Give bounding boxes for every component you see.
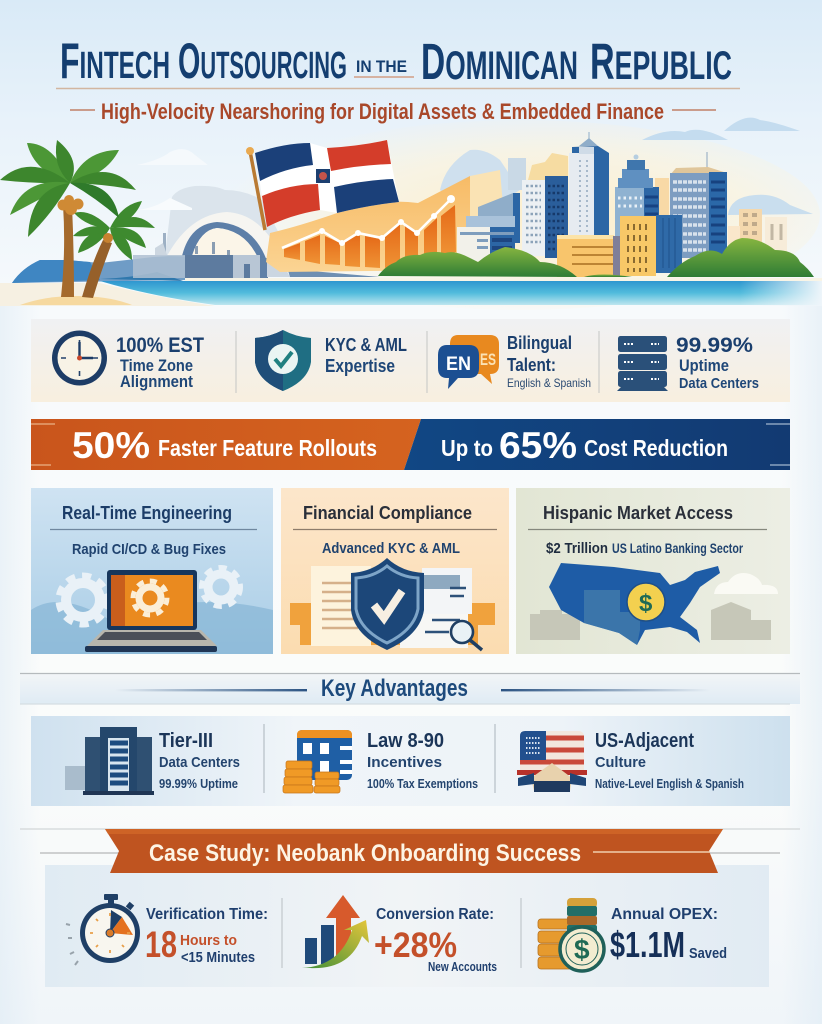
stat: bilingual: English & Spanish xyxy=(507,376,591,390)
title: FINTECH xyxy=(60,33,170,89)
stat: conversion rate: +28% xyxy=(374,926,457,965)
stat: uptime: Uptime xyxy=(679,356,729,375)
icon: dollar coin xyxy=(627,583,665,621)
left shore xyxy=(12,255,187,283)
skyline xyxy=(457,132,787,277)
banner: cost reduction xyxy=(404,419,790,470)
yellow buildings xyxy=(557,215,682,277)
panel: key advantages xyxy=(31,716,790,806)
stat: verification time: 18 xyxy=(145,924,177,965)
ribbon: case study heading xyxy=(105,829,723,873)
stat: conversion rate: Conversion Rate: xyxy=(376,906,494,923)
stat: tier-III: Tier-III xyxy=(159,730,213,752)
stepped tower xyxy=(615,154,659,237)
icon: language bubbles: EN xyxy=(446,354,471,375)
banner: cost reduction: Cost Reduction xyxy=(584,435,728,461)
flag xyxy=(246,140,399,230)
pale distant buildings xyxy=(728,209,787,254)
slate tower xyxy=(670,152,727,258)
stat: time zone xyxy=(116,334,204,391)
orange growth hill xyxy=(266,170,505,272)
stat: bilingual: Talent: xyxy=(507,355,556,375)
icon: magnifier xyxy=(451,621,482,650)
stat: law 8-90: Incentives xyxy=(367,754,442,771)
stat: law 8-90: 100% Tax Exemptions xyxy=(367,776,478,791)
stat: uptime xyxy=(676,334,759,392)
icon: shield with check xyxy=(351,558,424,650)
trees xyxy=(378,238,814,277)
cloud xyxy=(714,573,778,594)
hero illustration xyxy=(0,118,822,310)
stat: uptime: Data Centers xyxy=(679,375,759,392)
panel: hispanic market access xyxy=(516,488,790,654)
window tower xyxy=(522,176,568,258)
monument arch xyxy=(133,212,380,278)
title xyxy=(56,33,740,90)
panel: real-time engineering: Real-Time Engineering xyxy=(62,503,232,523)
icon: incentive building and coins xyxy=(283,730,352,793)
icon: stopwatch xyxy=(66,894,140,965)
stat: law 8-90 xyxy=(367,730,478,791)
sand and sea xyxy=(0,278,822,306)
stat: annual OPEX: Annual OPEX: xyxy=(611,906,718,923)
stat: bilingual xyxy=(507,333,591,390)
low blue building xyxy=(457,193,520,261)
panel: case study results xyxy=(20,829,800,987)
subtitle: High-Velocity Nearshoring for Digital Assets & Embedded Finance xyxy=(101,99,664,124)
banner: faster rollouts: 50% xyxy=(72,425,150,466)
stat: tier-III: 99.99% Uptime xyxy=(159,776,238,791)
stat: bilingual: Bilingual xyxy=(507,333,572,353)
trend line xyxy=(282,195,455,248)
stat: conversion rate xyxy=(374,906,497,974)
grey buildings xyxy=(530,602,771,640)
heading: key advantages: Key Advantages xyxy=(321,675,468,702)
title: REPUBLIC xyxy=(590,33,732,90)
ribbon: case study heading: Case Study: Neobank Onboarding Success xyxy=(149,840,581,867)
heading: key advantages xyxy=(20,674,800,704)
icon: shield xyxy=(255,330,311,391)
stat: KYC xyxy=(325,335,407,376)
small palm tree xyxy=(73,201,155,298)
panel: real-time engineering: Rapid CI/CD & Bug Fixes xyxy=(72,541,226,558)
stat: time zone: Time Zone xyxy=(120,356,193,375)
stat: US-adjacent xyxy=(595,730,744,791)
map of the US xyxy=(549,563,720,645)
large palm tree xyxy=(0,140,136,297)
stat: US-adjacent: US-Adjacent xyxy=(595,730,694,752)
icon: coin stacks: $ xyxy=(574,934,590,965)
stat: tier-III xyxy=(159,730,240,791)
icon: language bubbles: ES xyxy=(480,350,496,369)
document left xyxy=(311,566,371,646)
panel: hispanic market access: Hispanic Market Access xyxy=(543,503,733,523)
panel: hispanic market access: $2 Trillion xyxy=(546,540,608,557)
icon: coin stacks xyxy=(538,898,604,971)
panel: real-time engineering xyxy=(31,488,273,654)
stat: annual OPEX: $1.1M xyxy=(610,924,685,965)
stat: time zone: 100% EST xyxy=(116,334,204,357)
stat: KYC: KYC & AML xyxy=(325,335,407,355)
stat: US-adjacent: Culture xyxy=(595,754,646,771)
title: DOMINICAN xyxy=(421,33,578,90)
icon: server stack xyxy=(617,336,668,391)
stat: conversion rate: New Accounts xyxy=(428,959,497,974)
bar chart xyxy=(284,205,456,268)
stat: verification time: Verification Time: xyxy=(146,906,268,923)
icon: growth chart arrows xyxy=(302,895,369,968)
stat: verification time: Hours to xyxy=(180,932,237,949)
icon: dollar coin: $ xyxy=(639,590,653,617)
icon: US flag and book xyxy=(517,731,587,792)
stat: law 8-90: Law 8-90 xyxy=(367,730,444,752)
title: IN THE xyxy=(356,57,407,76)
panel: hispanic market access: US Latino Banking Sector xyxy=(612,541,744,556)
banner: faster rollouts: Faster Feature Rollouts xyxy=(158,435,377,461)
stat: tier-III: Data Centers xyxy=(159,754,240,771)
stat: time zone: Alignment xyxy=(120,372,193,391)
stat: verification time xyxy=(145,906,268,966)
panel: financial compliance: Financial Compliance xyxy=(303,503,472,523)
title: OUTSOURCING xyxy=(178,33,347,89)
stat: annual OPEX xyxy=(610,906,727,965)
document right xyxy=(400,568,472,648)
icon: gears xyxy=(59,568,240,624)
icon: language bubbles xyxy=(438,335,499,389)
stat: verification time: <15 Minutes xyxy=(181,949,255,966)
banner: key metrics xyxy=(31,419,790,470)
banner: cost reduction: 65% xyxy=(499,425,577,466)
stat: annual OPEX: Saved xyxy=(689,945,727,962)
clouds xyxy=(137,118,813,255)
banner: cost reduction: Up to xyxy=(441,435,493,461)
stat: KYC: Expertise xyxy=(325,356,395,376)
icon: data center xyxy=(65,727,154,795)
panel: financial compliance: Advanced KYC & AML xyxy=(322,540,460,557)
icon: laptop xyxy=(85,570,217,652)
orange folder xyxy=(290,603,495,645)
panel: top stats xyxy=(31,319,790,402)
main tower xyxy=(569,132,609,236)
panel: financial compliance xyxy=(281,488,509,654)
stat: US-adjacent: Native-Level English & Spanish xyxy=(595,776,744,791)
icon: clock xyxy=(52,330,107,386)
stat: uptime: 99.99% xyxy=(676,334,753,357)
banner: faster rollouts xyxy=(31,419,421,470)
